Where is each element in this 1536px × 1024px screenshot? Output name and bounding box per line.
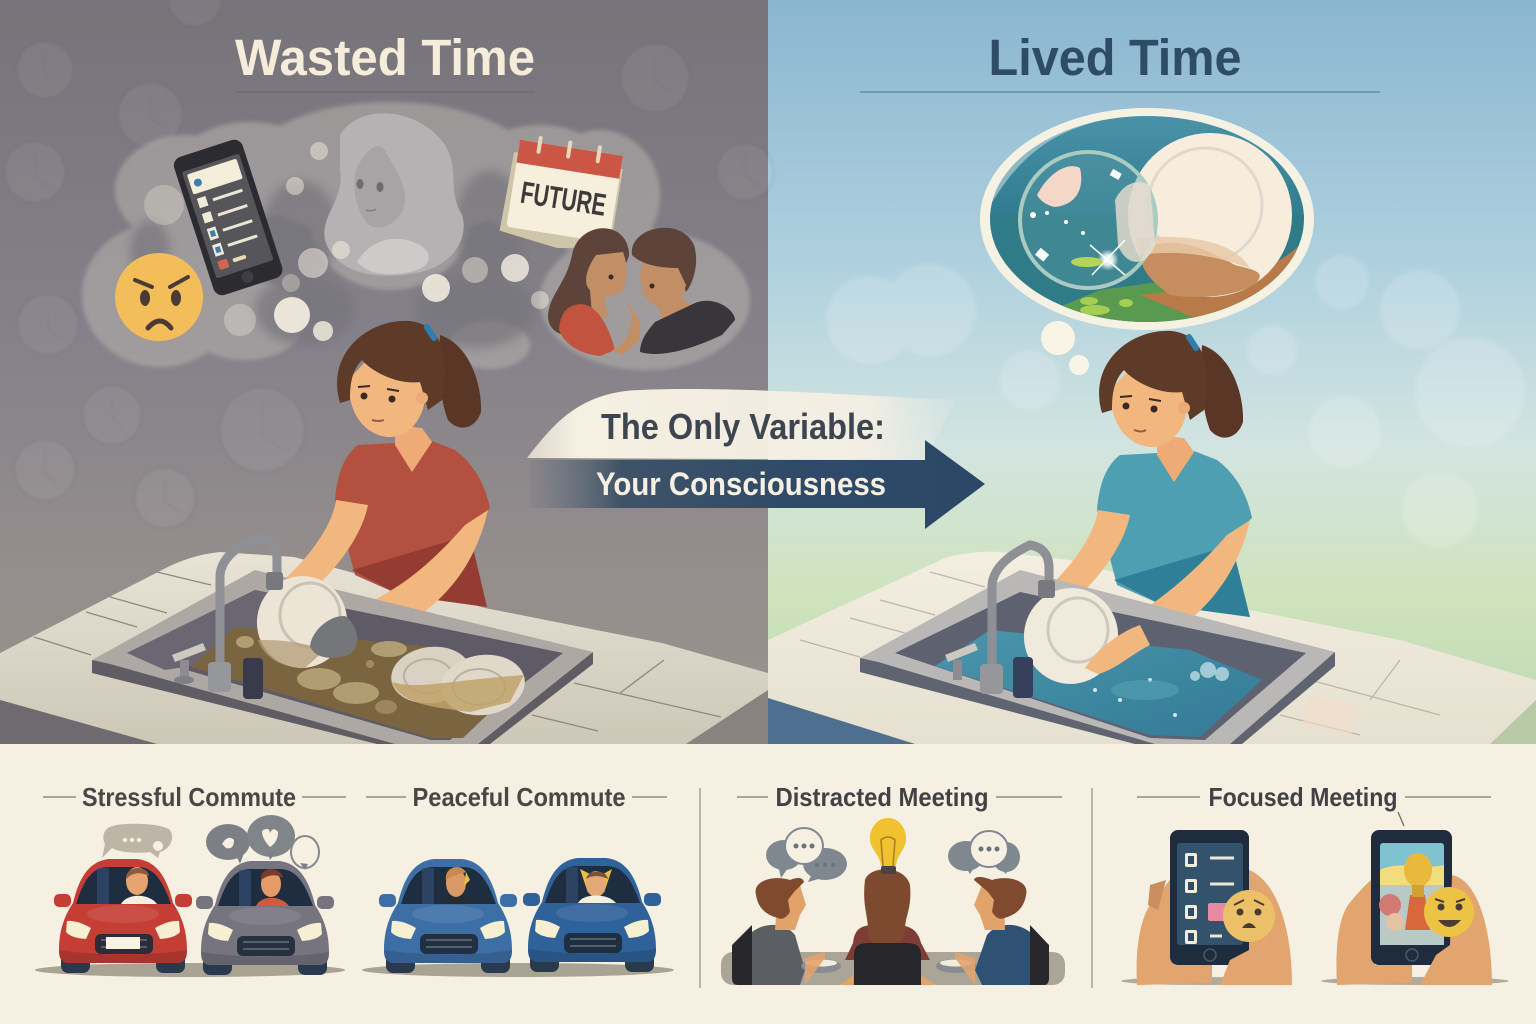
washed plate in hand bbox=[247, 566, 357, 678]
commute ground shadows bbox=[35, 963, 674, 977]
woman: wasted time bbox=[262, 321, 490, 648]
car: blue 2 bbox=[523, 858, 661, 972]
title: lived time: Lived Time bbox=[988, 29, 1242, 86]
phone bbox=[1371, 830, 1452, 965]
clean plate in hand bbox=[1013, 577, 1150, 695]
panel: bottom strip bbox=[0, 744, 1536, 1024]
mindful thought bubble bbox=[980, 108, 1320, 375]
plate in bubble bbox=[1128, 133, 1292, 297]
sad emoji bbox=[1223, 890, 1275, 942]
dark arrow bbox=[530, 440, 985, 529]
driver bbox=[440, 867, 474, 904]
speech bubbles: right bbox=[948, 831, 1020, 874]
distracted meeting scene bbox=[721, 818, 1065, 985]
icon: light bulb bbox=[870, 818, 906, 874]
counter bbox=[768, 552, 1536, 744]
panel: lived time background bbox=[768, 0, 1536, 744]
speech bubbles: stressful car bbox=[102, 824, 172, 858]
water bubbles bbox=[1058, 662, 1229, 717]
icon: future calendar bbox=[498, 134, 626, 256]
title: wasted time: Wasted Time bbox=[235, 29, 535, 86]
banner text line 1: The Only Variable: bbox=[601, 406, 885, 447]
sink bbox=[860, 570, 1335, 744]
floating thought bubbles bbox=[144, 142, 549, 341]
hands behind bbox=[1137, 880, 1212, 985]
panel: wasted time background bbox=[0, 0, 768, 744]
woman: lived time bbox=[1024, 331, 1252, 672]
icon: angry emoji bbox=[115, 253, 203, 341]
focused meeting: left phone bbox=[1121, 830, 1292, 985]
faucet bbox=[945, 545, 1055, 698]
car: red bbox=[54, 859, 192, 973]
center woman bbox=[845, 869, 930, 985]
banner: the only variable bbox=[527, 389, 985, 529]
cups and arms bbox=[801, 952, 976, 985]
phone bbox=[1170, 830, 1249, 965]
heading: peaceful commute: Peaceful Commute bbox=[412, 782, 626, 812]
speech bubbles: left bbox=[766, 828, 847, 882]
soap bubble bbox=[1020, 152, 1156, 288]
sink bbox=[92, 570, 593, 744]
heading: focused meeting: Focused Meeting bbox=[1208, 782, 1398, 812]
icon: phone with social feed bbox=[172, 137, 285, 298]
happy emoji bbox=[1424, 887, 1474, 937]
table bbox=[721, 952, 1065, 985]
soap scum spots bbox=[236, 636, 407, 714]
icon: future calendar: FUTURE bbox=[518, 175, 609, 223]
right man bbox=[974, 877, 1030, 985]
left man bbox=[752, 878, 806, 985]
car: blue 1 bbox=[379, 859, 517, 973]
portrait of remembered woman bbox=[324, 113, 464, 276]
banner text line 2: Your Consciousness bbox=[596, 466, 886, 502]
speech bubbles: gray car bbox=[206, 815, 319, 870]
sink scene: lived time bbox=[768, 331, 1536, 744]
sink scene: wasted time bbox=[0, 321, 768, 744]
white ribbon bbox=[527, 389, 955, 460]
driver bbox=[578, 869, 616, 903]
chairs bbox=[732, 925, 1049, 985]
heading: stressful commute: Stressful Commute bbox=[82, 782, 296, 812]
driver bbox=[256, 869, 289, 906]
small thought bubbles bbox=[1041, 321, 1089, 375]
clear water bbox=[935, 630, 1262, 737]
driver bbox=[121, 867, 157, 904]
gray sponge bbox=[310, 616, 357, 658]
faded clocks background bbox=[5, 0, 773, 528]
focused meeting: right phone bbox=[1321, 812, 1509, 985]
dirty water bbox=[191, 627, 527, 738]
heading: distracted meeting: Distracted Meeting bbox=[776, 782, 988, 812]
soft light circles background bbox=[826, 255, 1525, 548]
faucet bbox=[172, 538, 283, 699]
car: gray bbox=[196, 861, 334, 975]
counter bbox=[0, 552, 768, 744]
icon: couple bbox=[548, 228, 735, 356]
worry thought cloud bbox=[82, 102, 750, 370]
bulb on screen bbox=[1404, 853, 1432, 887]
dirty plates bbox=[387, 642, 529, 721]
